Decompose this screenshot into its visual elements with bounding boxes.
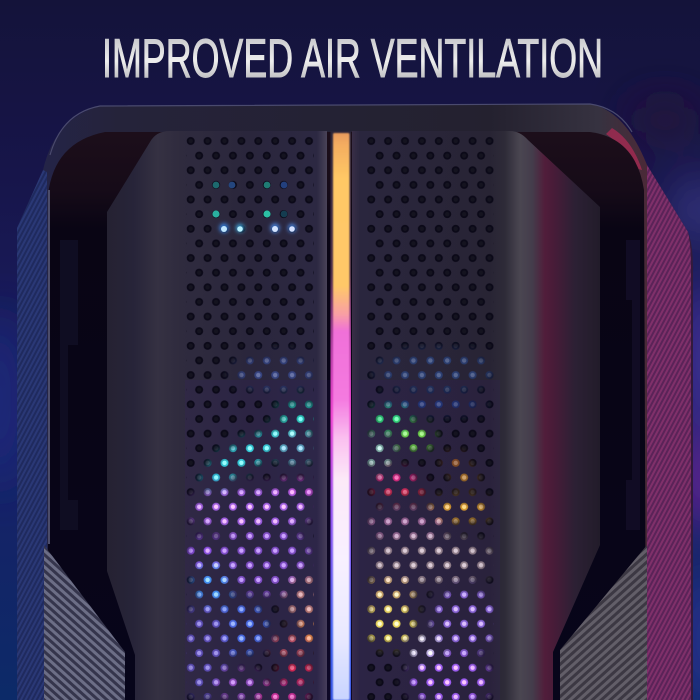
left carbon side panel	[17, 170, 50, 700]
LED light bar	[330, 131, 351, 700]
inner recess	[48, 132, 646, 700]
bottom purple tint	[185, 380, 500, 700]
upper lit fan dots	[212, 182, 296, 232]
right side vents	[626, 240, 640, 530]
right front panel	[352, 131, 600, 700]
perforated ventilation holes with RGB light	[180, 130, 500, 700]
right lower carbon insert	[560, 545, 647, 700]
left front panel	[107, 131, 327, 700]
left lower carbon insert	[44, 545, 125, 700]
right carbon side panel	[647, 165, 691, 700]
left side vents	[60, 240, 78, 530]
rim highlight	[50, 104, 632, 155]
rim red reflection	[606, 128, 642, 170]
